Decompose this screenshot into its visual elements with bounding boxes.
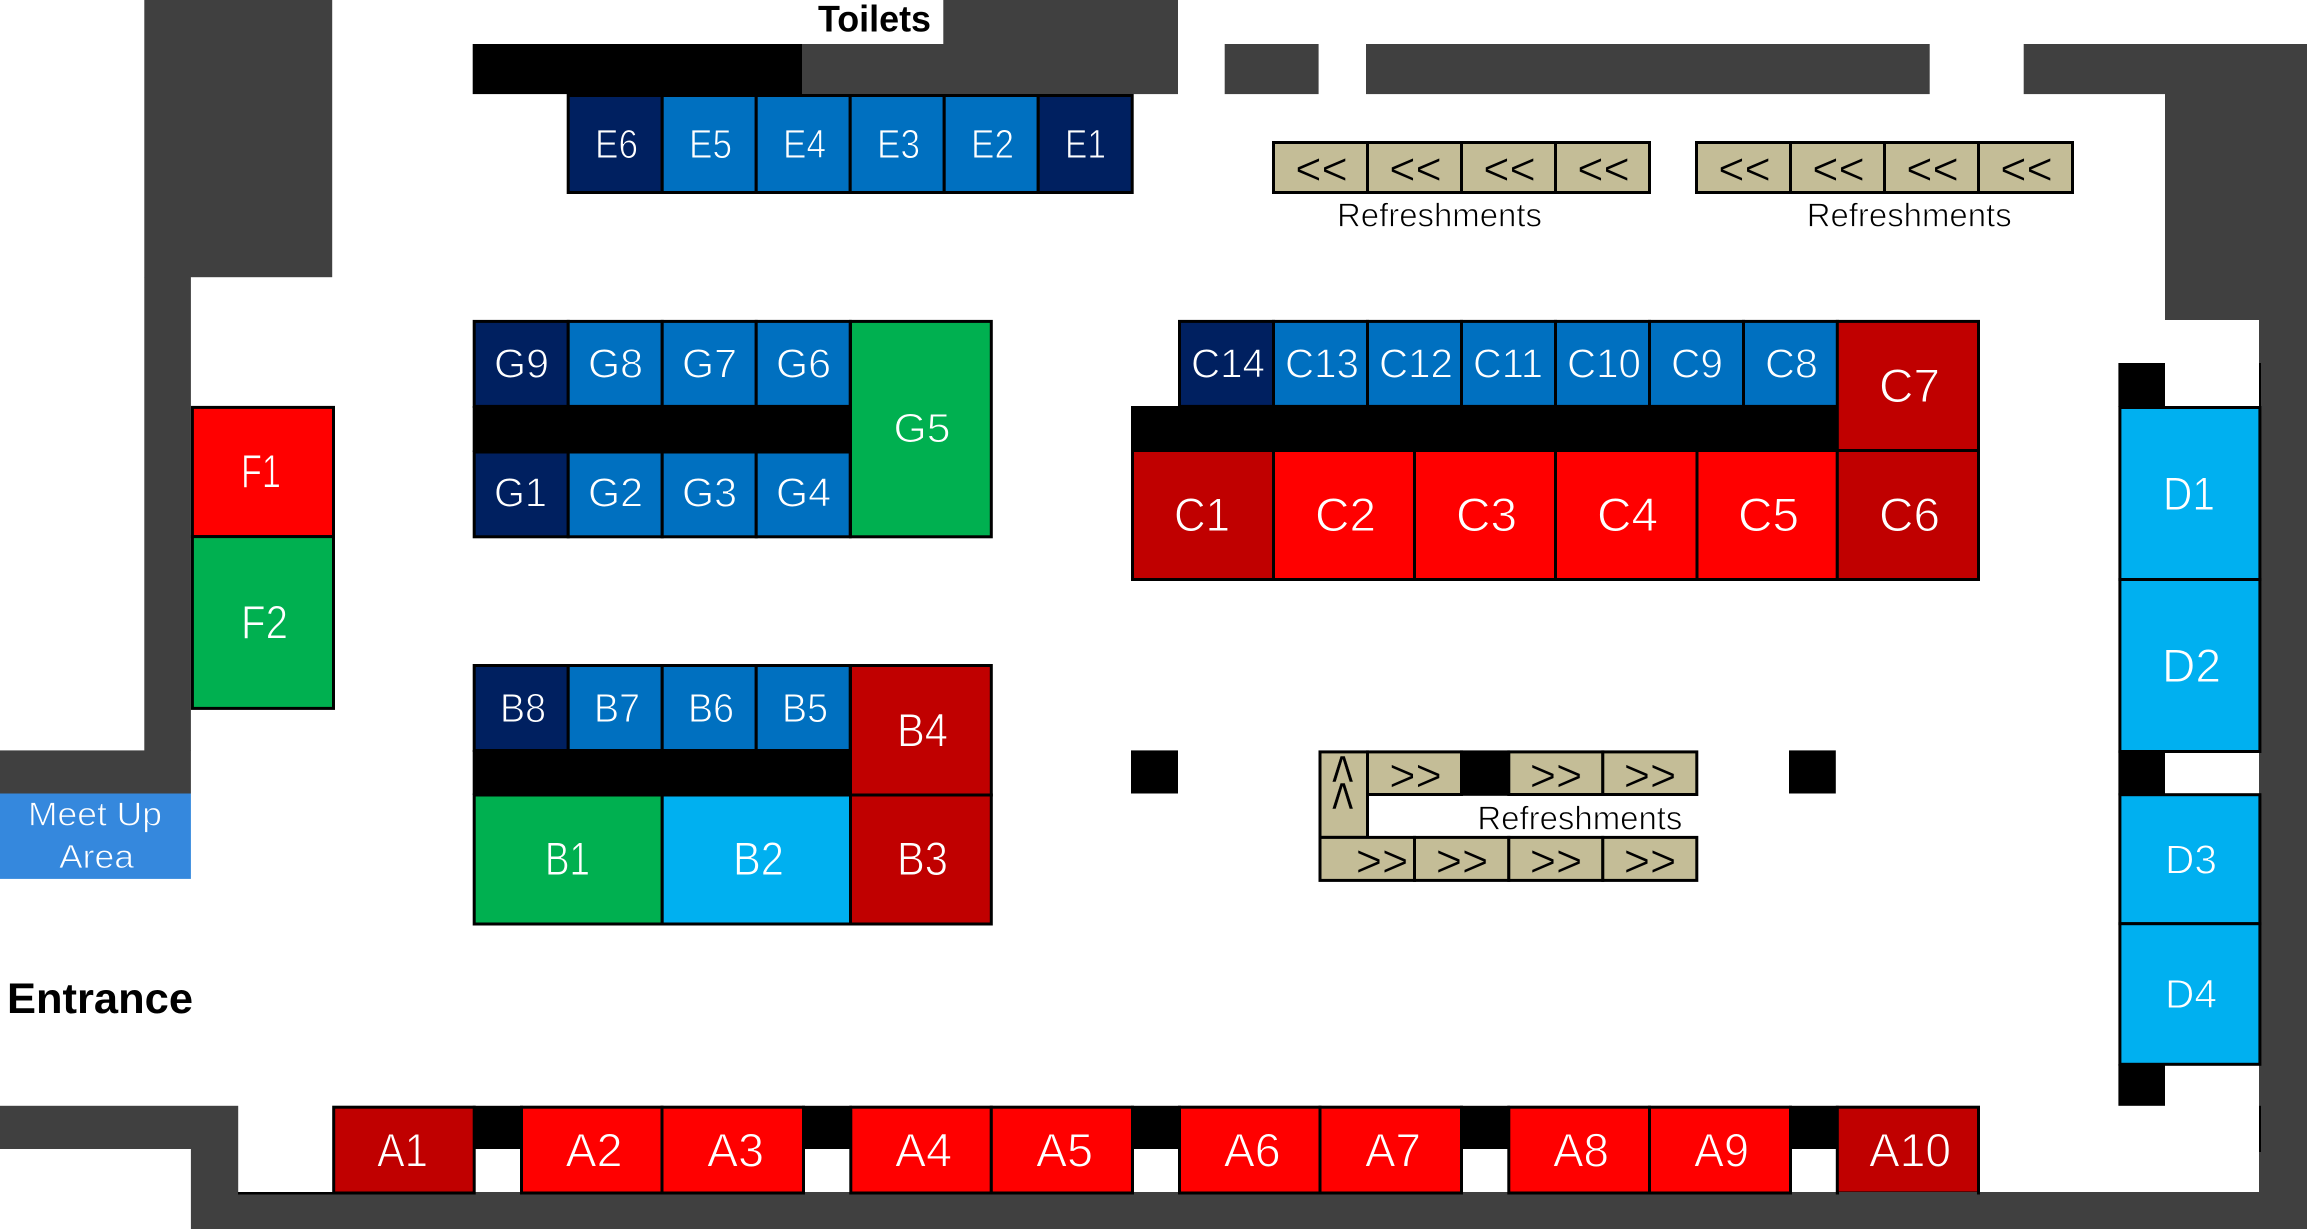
booth B8: B8 <box>500 685 546 731</box>
booth B6: B6 <box>688 685 734 731</box>
booth C3 <box>1414 450 1556 580</box>
booth A1: A1 <box>377 1124 428 1177</box>
panel: row E booths <box>568 96 1132 192</box>
booth G5 <box>850 321 991 537</box>
booth C4: C4 <box>1597 488 1658 541</box>
panel: refreshments top right: << <box>1718 144 1771 194</box>
booth C10: C10 <box>1567 341 1641 387</box>
booth C7: C7 <box>1879 359 1940 412</box>
booth B4: B4 <box>897 703 948 756</box>
booth A3 <box>662 1107 804 1193</box>
booth E6: E6 <box>595 121 638 167</box>
panel: Meet Up Area: Area <box>59 838 135 875</box>
booth G9 <box>474 321 568 406</box>
booth B1: B1 <box>545 832 590 885</box>
panel: row G booths <box>474 321 991 537</box>
booth A9 <box>1650 1107 1790 1193</box>
booth C8 <box>1744 321 1838 406</box>
wall covering base of booth A10 <box>1839 1192 1977 1196</box>
booth E1 <box>1038 96 1132 192</box>
panel: Meet Up Area <box>0 794 191 879</box>
panel: refreshments centre: >> <box>1530 750 1582 801</box>
booth F2 <box>192 537 334 708</box>
panel: refreshments centre <box>1320 740 1697 886</box>
booth G2 <box>568 452 662 537</box>
panel: row A booths <box>334 1107 1979 1193</box>
booth C9 <box>1650 321 1744 406</box>
booth F1: F1 <box>241 444 281 498</box>
booth B2: B2 <box>733 832 784 885</box>
booth C9: C9 <box>1671 341 1723 387</box>
booth B4 <box>850 666 991 795</box>
booth C12: C12 <box>1379 341 1453 387</box>
panel: refreshments centre: >> <box>1624 836 1676 886</box>
booth A8: A8 <box>1553 1124 1609 1177</box>
panel: refreshments centre: ^ <box>1332 767 1354 849</box>
booth G1: G1 <box>494 470 547 516</box>
panel: refreshments centre: >> <box>1624 750 1676 801</box>
booth E1: E1 <box>1065 121 1106 167</box>
booth D1 <box>2120 408 2260 580</box>
booth C11 <box>1462 321 1556 406</box>
booth F2: F2 <box>241 596 288 648</box>
panel: row F booths <box>192 407 334 708</box>
booth A5: A5 <box>1036 1124 1093 1177</box>
booth C7 <box>1837 321 1978 451</box>
panel: refreshments top left: << <box>1295 144 1348 194</box>
booth A1 <box>334 1107 474 1193</box>
booth A7 <box>1320 1107 1462 1193</box>
booth G8: G8 <box>588 341 643 387</box>
booth C1 <box>1132 450 1274 580</box>
booth G6 <box>756 321 850 406</box>
panel: refreshments centre: >> <box>1436 836 1488 886</box>
booth C2 <box>1274 450 1414 580</box>
black service strip by toilets <box>473 44 802 94</box>
booth C4 <box>1556 450 1698 580</box>
booth G3 <box>662 452 756 537</box>
booth B7 <box>568 666 662 750</box>
booth D4 <box>2120 924 2260 1064</box>
booth B5: B5 <box>782 685 828 731</box>
booth F1 <box>192 407 334 537</box>
black divider strips and pillars <box>238 363 2261 1194</box>
panel: refreshments top right: Refreshments <box>1807 197 2012 234</box>
booth B3 <box>850 795 991 924</box>
booth C2: C2 <box>1315 488 1376 541</box>
booth E3: E3 <box>877 121 920 167</box>
booth A10: A10 <box>1869 1124 1951 1177</box>
booth C13: C13 <box>1285 341 1359 387</box>
booth C8: C8 <box>1765 341 1818 387</box>
booth D4: D4 <box>2165 971 2217 1017</box>
booth E6 <box>568 96 662 192</box>
booth B7: B7 <box>594 685 640 731</box>
booth C13 <box>1274 321 1368 406</box>
booth C6: C6 <box>1879 488 1940 541</box>
booth A9: A9 <box>1694 1124 1749 1177</box>
booth G3: G3 <box>682 470 737 516</box>
booth C11: C11 <box>1473 341 1543 387</box>
booth A8 <box>1509 1107 1650 1193</box>
booth B1 <box>474 795 662 924</box>
booth C14: C14 <box>1191 341 1265 387</box>
booth E2 <box>944 96 1038 192</box>
booth C14 <box>1180 321 1274 406</box>
booth E3 <box>850 96 944 192</box>
booth D2: D2 <box>2162 639 2221 692</box>
panel: refreshments top left: << <box>1483 144 1536 194</box>
booth A5 <box>991 1107 1132 1193</box>
panel: refreshments centre: >> <box>1389 750 1442 801</box>
booth C1: C1 <box>1174 488 1230 541</box>
panel: refreshments top right <box>1696 142 2072 234</box>
booth B6 <box>662 666 756 750</box>
booth C5: C5 <box>1738 488 1799 541</box>
booth G7: G7 <box>682 341 737 387</box>
panel: refreshments top left: << <box>1389 144 1442 194</box>
booth E5: E5 <box>689 121 732 167</box>
booth D3 <box>2120 795 2260 924</box>
booth E4 <box>756 96 850 192</box>
booth E5 <box>662 96 756 192</box>
booth A3: A3 <box>707 1124 764 1177</box>
booth C12 <box>1368 321 1462 406</box>
heading: Entrance: Entrance <box>7 975 193 1023</box>
booth G4 <box>756 452 850 537</box>
panel: Meet Up Area: Meet Up <box>28 796 162 832</box>
booth A2 <box>522 1107 662 1193</box>
booth G4: G4 <box>776 470 831 516</box>
panel: refreshments centre: >> <box>1530 836 1582 886</box>
booth G9: G9 <box>494 341 549 387</box>
booth D3: D3 <box>2165 836 2217 882</box>
booth E4: E4 <box>783 121 826 167</box>
booth D2 <box>2120 580 2260 752</box>
booth A2: A2 <box>566 1124 622 1177</box>
panel: row C booths <box>1132 321 1978 580</box>
booth A10 <box>1837 1107 1978 1193</box>
panel: refreshments centre: >> <box>1356 836 1408 886</box>
booth C3: C3 <box>1456 488 1517 541</box>
booth A6 <box>1180 1107 1320 1193</box>
panel: refreshments top left <box>1274 142 1650 234</box>
panel: refreshments top right: << <box>2000 144 2053 194</box>
booth G6: G6 <box>776 341 831 387</box>
booth C10 <box>1556 321 1650 406</box>
panel: refreshments top left: Refreshments <box>1337 197 1542 234</box>
panel: row D booths <box>2120 408 2260 1064</box>
booth B8 <box>474 666 568 750</box>
booth D1: D1 <box>2163 467 2215 520</box>
booth G7 <box>662 321 756 406</box>
booth C6 <box>1837 450 1978 580</box>
booth C5 <box>1697 450 1837 580</box>
booth G8 <box>568 321 662 406</box>
panel: refreshments top right: << <box>1812 144 1865 194</box>
booth B5 <box>756 666 850 750</box>
booth A4 <box>851 1107 991 1193</box>
booth A4: A4 <box>895 1124 952 1177</box>
panel: refreshments centre: Refreshments <box>1477 800 1682 836</box>
booth B2 <box>662 795 850 924</box>
booth G5: G5 <box>894 405 950 451</box>
booth G1 <box>474 452 568 537</box>
booth E2: E2 <box>971 121 1014 167</box>
booth G2: G2 <box>588 470 643 516</box>
booth B3: B3 <box>897 832 948 885</box>
booth A7: A7 <box>1365 1124 1421 1177</box>
panel: refreshments top left: << <box>1577 144 1630 194</box>
panel: refreshments centre: ^ <box>1332 740 1354 822</box>
booth A6: A6 <box>1224 1124 1281 1177</box>
panel: refreshments top right: << <box>1906 144 1959 194</box>
panel: row B booths <box>474 666 991 924</box>
